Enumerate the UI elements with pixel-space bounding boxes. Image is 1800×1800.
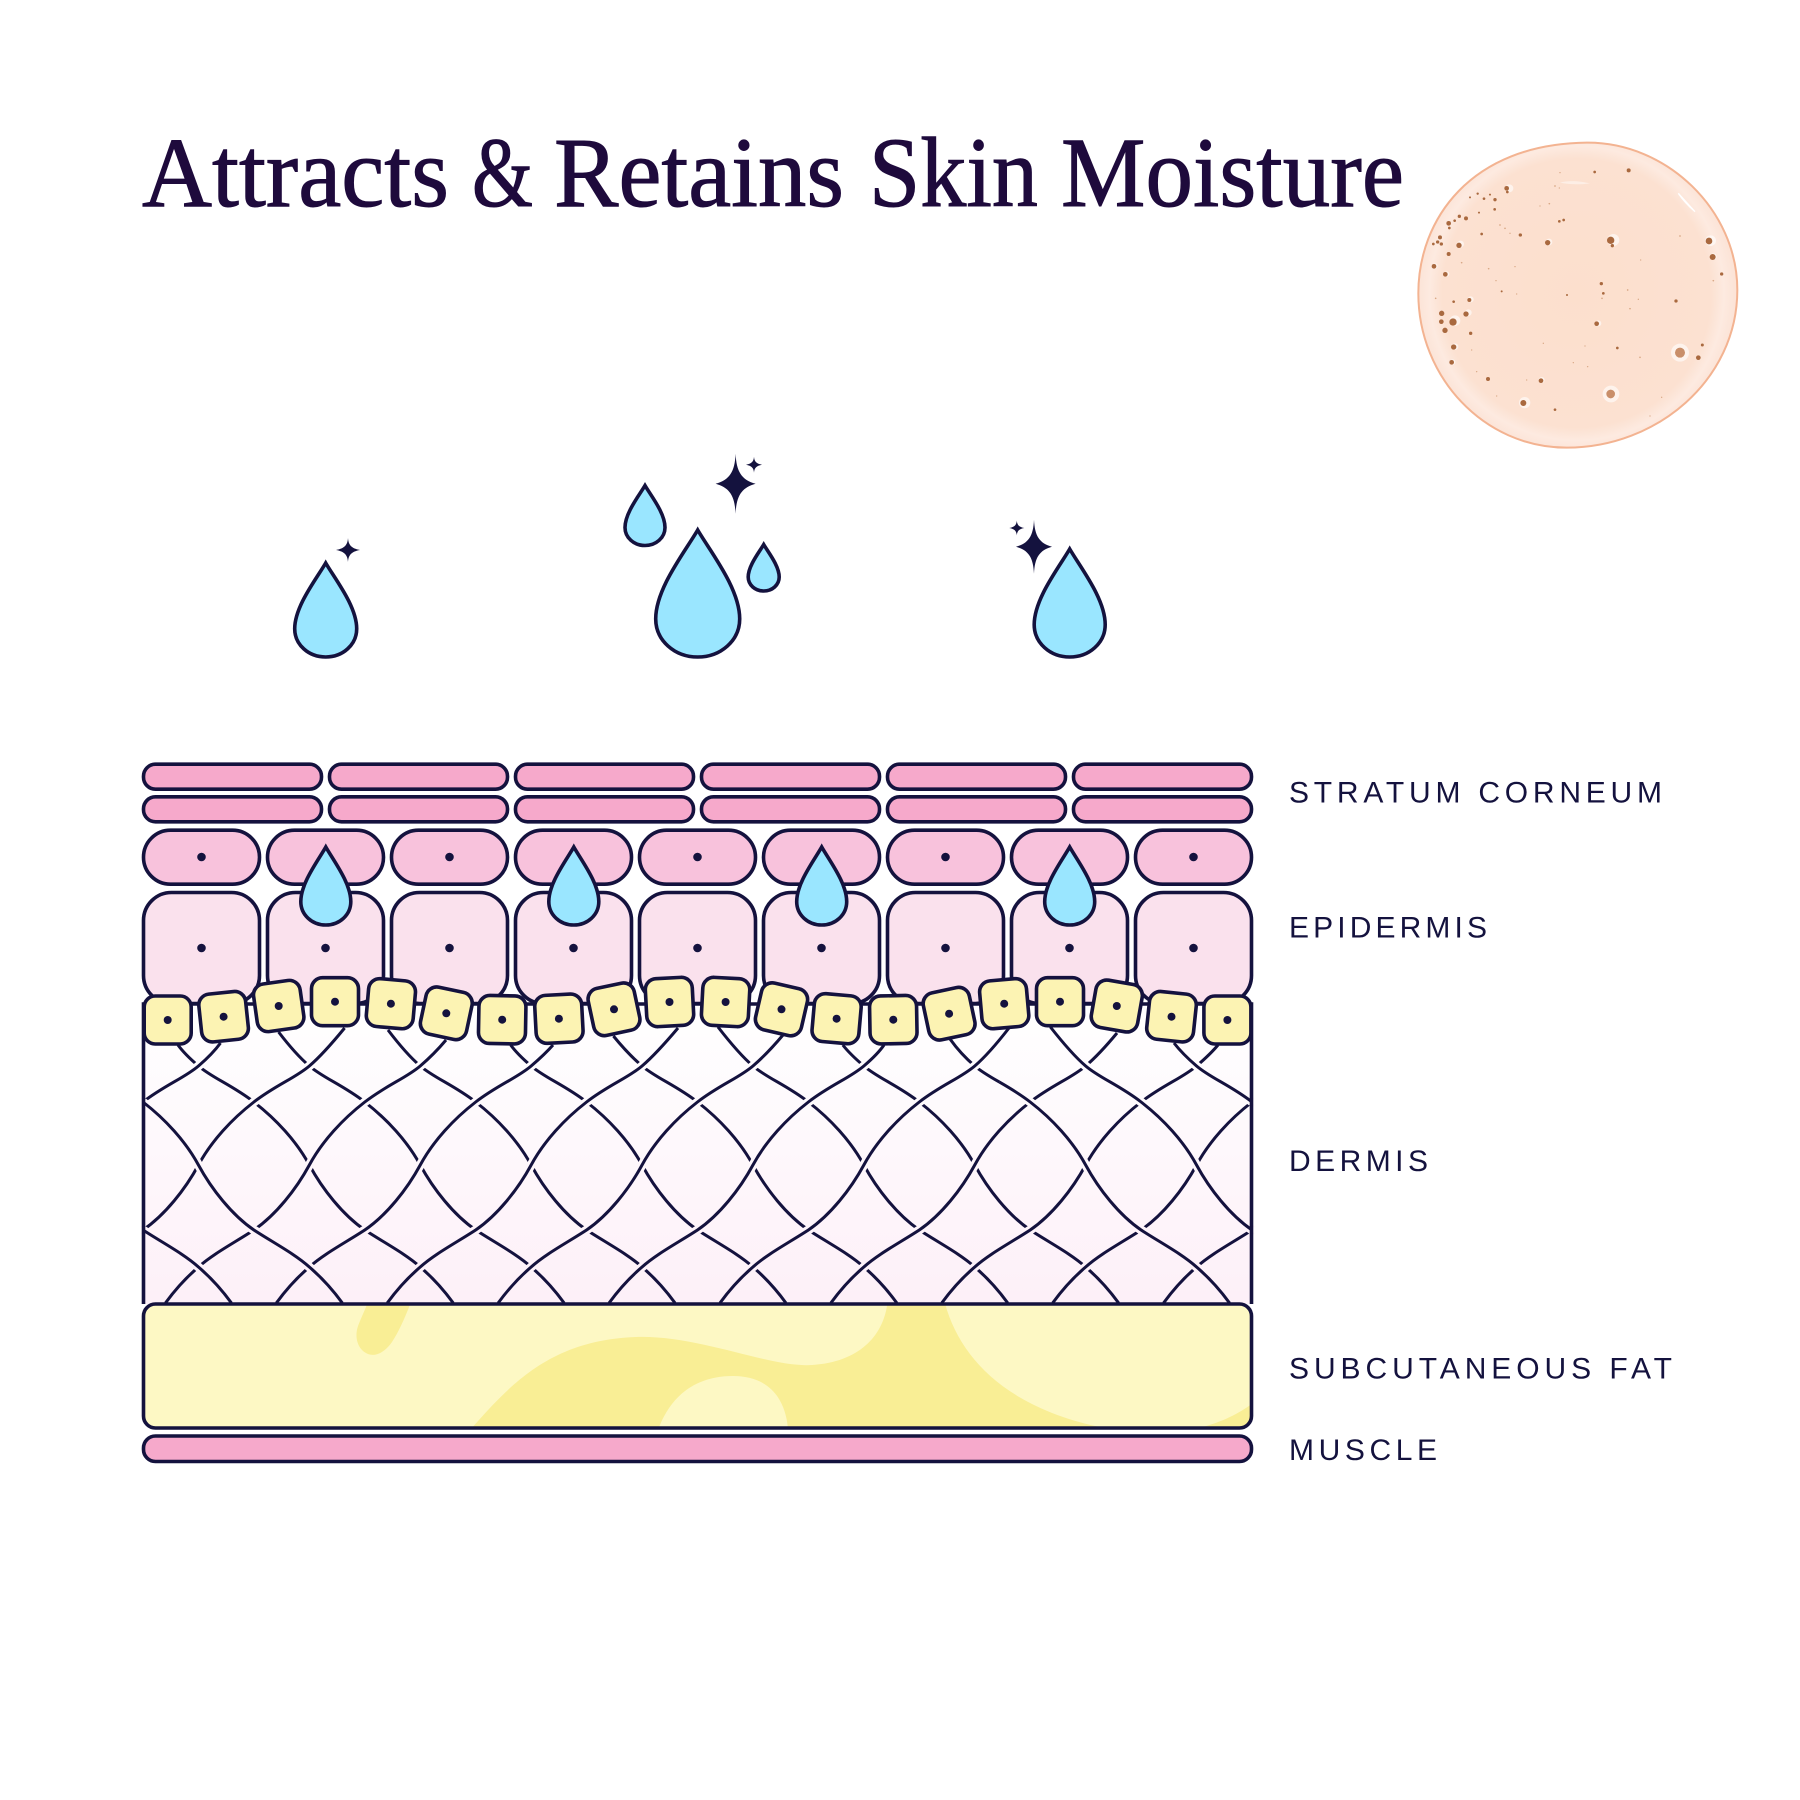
dermis background — [144, 1004, 1252, 1304]
title: & — [472, 117, 533, 228]
icon: large center drop — [656, 530, 740, 657]
dermis outline — [144, 1004, 1252, 1304]
stratum corneum layer — [144, 764, 1252, 822]
title: Attracts — [142, 117, 449, 228]
title: Retains — [554, 117, 844, 228]
basal cell nuclei — [164, 998, 1231, 1024]
icon: left drop — [295, 563, 357, 657]
label: muscle: MUSCLE — [1289, 1434, 1437, 1467]
upper epidermis cells — [144, 830, 1252, 884]
dermis collagen mesh — [143, 1027, 1252, 1303]
label: epidermis: EPIDERMIS — [1289, 912, 1487, 944]
serum droplet swatch — [1418, 143, 1737, 448]
basal layer yellow cells — [144, 977, 1251, 1045]
title: Skin — [869, 117, 1038, 228]
water drops with sparkles above the skin — [295, 454, 1105, 657]
icon: large right sparkle — [1016, 520, 1052, 574]
label: subcutaneous fat: SUBCUTANEOUS FAT — [1289, 1352, 1672, 1386]
icon: small center sparkle — [746, 457, 762, 473]
icon: small right sparkle — [1009, 520, 1024, 536]
label: dermis: DERMIS — [1289, 1145, 1428, 1178]
label: stratum corneum: STRATUM CORNEUM — [1289, 776, 1662, 810]
icon: small right drop — [748, 544, 779, 591]
lower epidermis cells — [144, 892, 1252, 1004]
subcutaneous fat layer — [144, 1302, 1253, 1430]
water drops absorbed into epidermis — [301, 847, 1095, 925]
icon: right drop — [1034, 549, 1105, 657]
skin cross-section diagram — [143, 764, 1253, 1462]
icon: large center sparkle — [716, 454, 756, 514]
title — [142, 117, 1404, 228]
muscle layer — [144, 1436, 1252, 1462]
epidermis cell nuclei — [197, 853, 1198, 952]
icon: sparkle by left drop — [336, 538, 360, 562]
layer labels — [1289, 776, 1672, 1467]
icon: small upper-left drop — [625, 486, 665, 546]
title: Moisture — [1061, 117, 1404, 228]
